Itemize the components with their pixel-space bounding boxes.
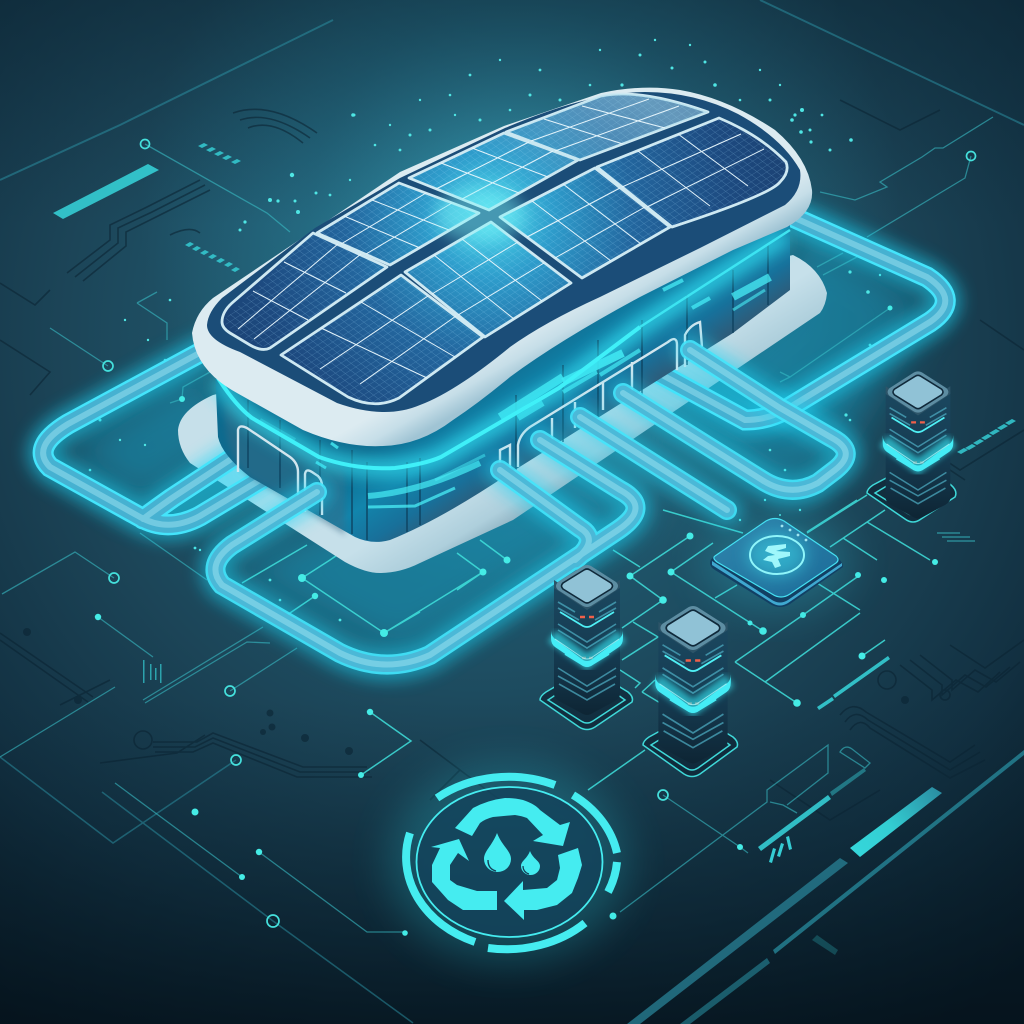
panel sheen xyxy=(409,94,708,210)
background glow behind building xyxy=(0,0,1024,700)
cooling pipes behind building xyxy=(43,218,945,525)
roof white rim xyxy=(192,88,812,446)
recycling water badge xyxy=(388,762,628,962)
sparkle particles xyxy=(89,39,881,621)
server tower 1 xyxy=(551,565,623,715)
server tower 3 xyxy=(883,371,953,518)
solar panels xyxy=(222,94,787,404)
platform base xyxy=(178,255,827,573)
chip with plug icon xyxy=(702,512,852,612)
roof with solar array xyxy=(192,88,812,446)
light streaks xyxy=(260,230,790,507)
glowing band under roof xyxy=(218,235,786,468)
glass mullions xyxy=(248,245,768,540)
door frames xyxy=(238,322,702,515)
cooling pipes in front xyxy=(215,350,846,665)
glow inside pipe loops xyxy=(60,220,930,660)
plug icon xyxy=(763,544,790,568)
solar glow highlight xyxy=(435,187,525,243)
dark circuit board traces xyxy=(0,100,1024,820)
cyan circuit traces xyxy=(0,117,993,932)
fine cell grid xyxy=(222,94,787,404)
server base rings xyxy=(540,468,956,776)
recycle arrows xyxy=(431,798,582,920)
water drops xyxy=(484,833,540,875)
server tower 2 xyxy=(655,606,731,763)
roof dark inset xyxy=(207,92,800,412)
badge outer broken ring xyxy=(406,777,617,949)
plug icon ring xyxy=(750,536,804,574)
building glass body xyxy=(215,225,790,542)
major panel grid lines xyxy=(238,99,764,384)
circuit nodes xyxy=(95,140,976,936)
badge inner ring xyxy=(416,787,602,937)
